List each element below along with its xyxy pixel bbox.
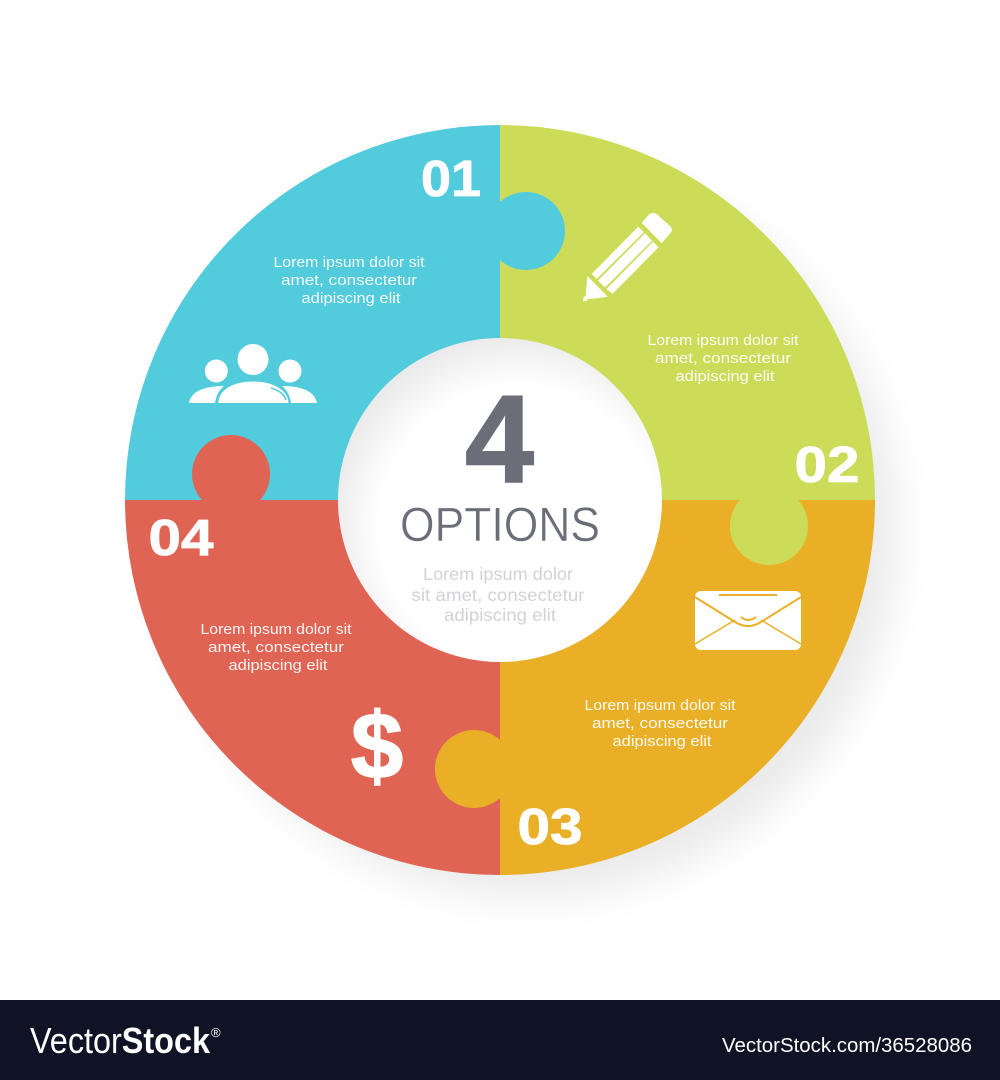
puzzle ring xyxy=(125,125,875,875)
panel: segment 03 orange xyxy=(500,500,875,875)
icon: people xyxy=(189,344,317,403)
footer logo: VectorStock xyxy=(30,1020,211,1061)
text block 02: adipiscing elit xyxy=(676,368,775,385)
registered mark: ® xyxy=(211,1025,221,1040)
panel: segment 02 green xyxy=(500,125,875,500)
text block 01: Lorem ipsum dolor sit xyxy=(274,254,425,271)
text block 01: adipiscing elit xyxy=(302,290,401,307)
heading: OPTIONS: OPTIONS xyxy=(400,499,600,552)
puzzle knob blue xyxy=(487,192,565,270)
text block 03: amet, consectetur xyxy=(592,715,728,732)
icon: dollar sign: $ xyxy=(351,693,403,798)
number 04: 04 xyxy=(148,509,214,566)
center text block xyxy=(412,564,585,625)
footer image id: VectorStock.com/36528086 xyxy=(722,1035,972,1057)
text block 01 xyxy=(274,254,425,307)
center circle xyxy=(338,338,662,662)
text block 02: Lorem ipsum dolor sit xyxy=(648,332,799,349)
text block 04: amet, consectetur xyxy=(208,639,344,656)
text block 03: Lorem ipsum dolor sit xyxy=(584,697,736,714)
text block 04: adipiscing elit xyxy=(228,657,328,674)
puzzle knob green xyxy=(730,487,808,565)
text block 01: amet, consectetur xyxy=(281,272,417,289)
puzzle knob orange xyxy=(435,730,513,808)
number 02: 02 xyxy=(794,436,860,493)
panel: segment 04 red xyxy=(125,500,500,875)
text block 03: adipiscing elit xyxy=(612,733,712,750)
text block 02 xyxy=(648,332,799,385)
panel: segment 01 blue xyxy=(125,125,500,500)
big number 4: 4 xyxy=(465,371,534,509)
icon: envelope xyxy=(695,591,801,650)
drop shadow xyxy=(162,162,898,898)
icon: pencil xyxy=(583,213,672,302)
text block 04 xyxy=(200,621,352,674)
center text block: adipiscing elit xyxy=(444,605,556,625)
footer bar xyxy=(0,1000,1000,1080)
center text block: Lorem ipsum dolor xyxy=(423,564,573,584)
center text block: sit amet, consectetur xyxy=(412,585,585,605)
number 01: 01 xyxy=(421,150,481,207)
puzzle knob red xyxy=(192,435,270,513)
text block 03 xyxy=(584,697,736,750)
number 03: 03 xyxy=(518,798,582,855)
text block 04: Lorem ipsum dolor sit xyxy=(200,621,352,638)
text block 02: amet, consectetur xyxy=(655,350,791,367)
